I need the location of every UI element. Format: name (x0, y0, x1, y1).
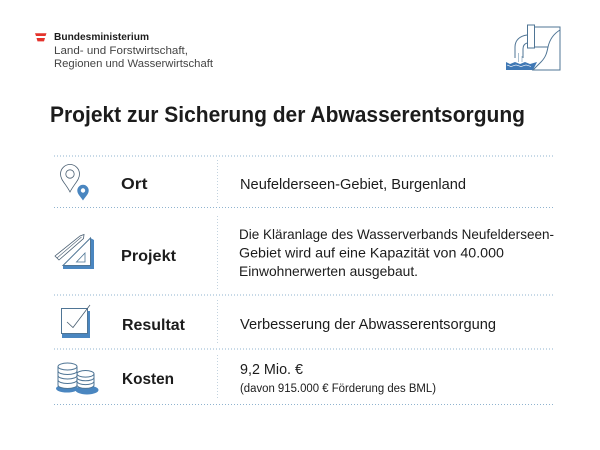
icon: wastewater pipe (506, 25, 560, 70)
value: Projekt: Einwohnerwerten ausgebaut. (239, 263, 418, 279)
label: Ort: Ort (121, 176, 148, 193)
icon: ruler and pencil (55, 234, 94, 269)
ministry name: Bundesministerium (54, 31, 149, 43)
ministry logo (35, 31, 213, 70)
value: Projekt: Gebiet wird auf eine Kapazität von 40.000 (239, 244, 504, 260)
icon: location pins (60, 164, 89, 200)
icon: coin stacks (56, 363, 98, 394)
value: Projekt: Die Kläranlage des Wasserverbands Neufelderseen- (239, 226, 554, 242)
row: Projekt (55, 226, 554, 279)
row: Ort (60, 164, 466, 200)
label: Resultat: Resultat (122, 317, 186, 334)
row: Resultat (62, 305, 496, 338)
value: Resultat: Verbesserung der Abwasserentsorgung (240, 316, 496, 333)
label: Kosten: Kosten (122, 371, 174, 388)
value: Kosten (240, 361, 436, 395)
icon: red flag (35, 33, 46, 41)
row: Kosten (56, 361, 436, 395)
title: Projekt zur Sicherung der Abwasserentsorgung (50, 102, 525, 127)
ministry name (54, 31, 213, 70)
table grid lines (54, 156, 554, 404)
label: Projekt: Projekt (121, 248, 177, 265)
icon: checked box (62, 305, 90, 338)
value: Projekt (239, 226, 554, 279)
ministry name: Regionen und Wasserwirtschaft (54, 58, 213, 70)
value: Ort: Neufelderseen-Gebiet, Burgenland (240, 176, 466, 193)
value: Kosten: 9,2 Mio. € (240, 361, 304, 378)
value: Kosten: (davon 915.000 € Förderung des BML) (240, 383, 436, 395)
ministry name: Land- und Forstwirtschaft, (54, 45, 188, 57)
